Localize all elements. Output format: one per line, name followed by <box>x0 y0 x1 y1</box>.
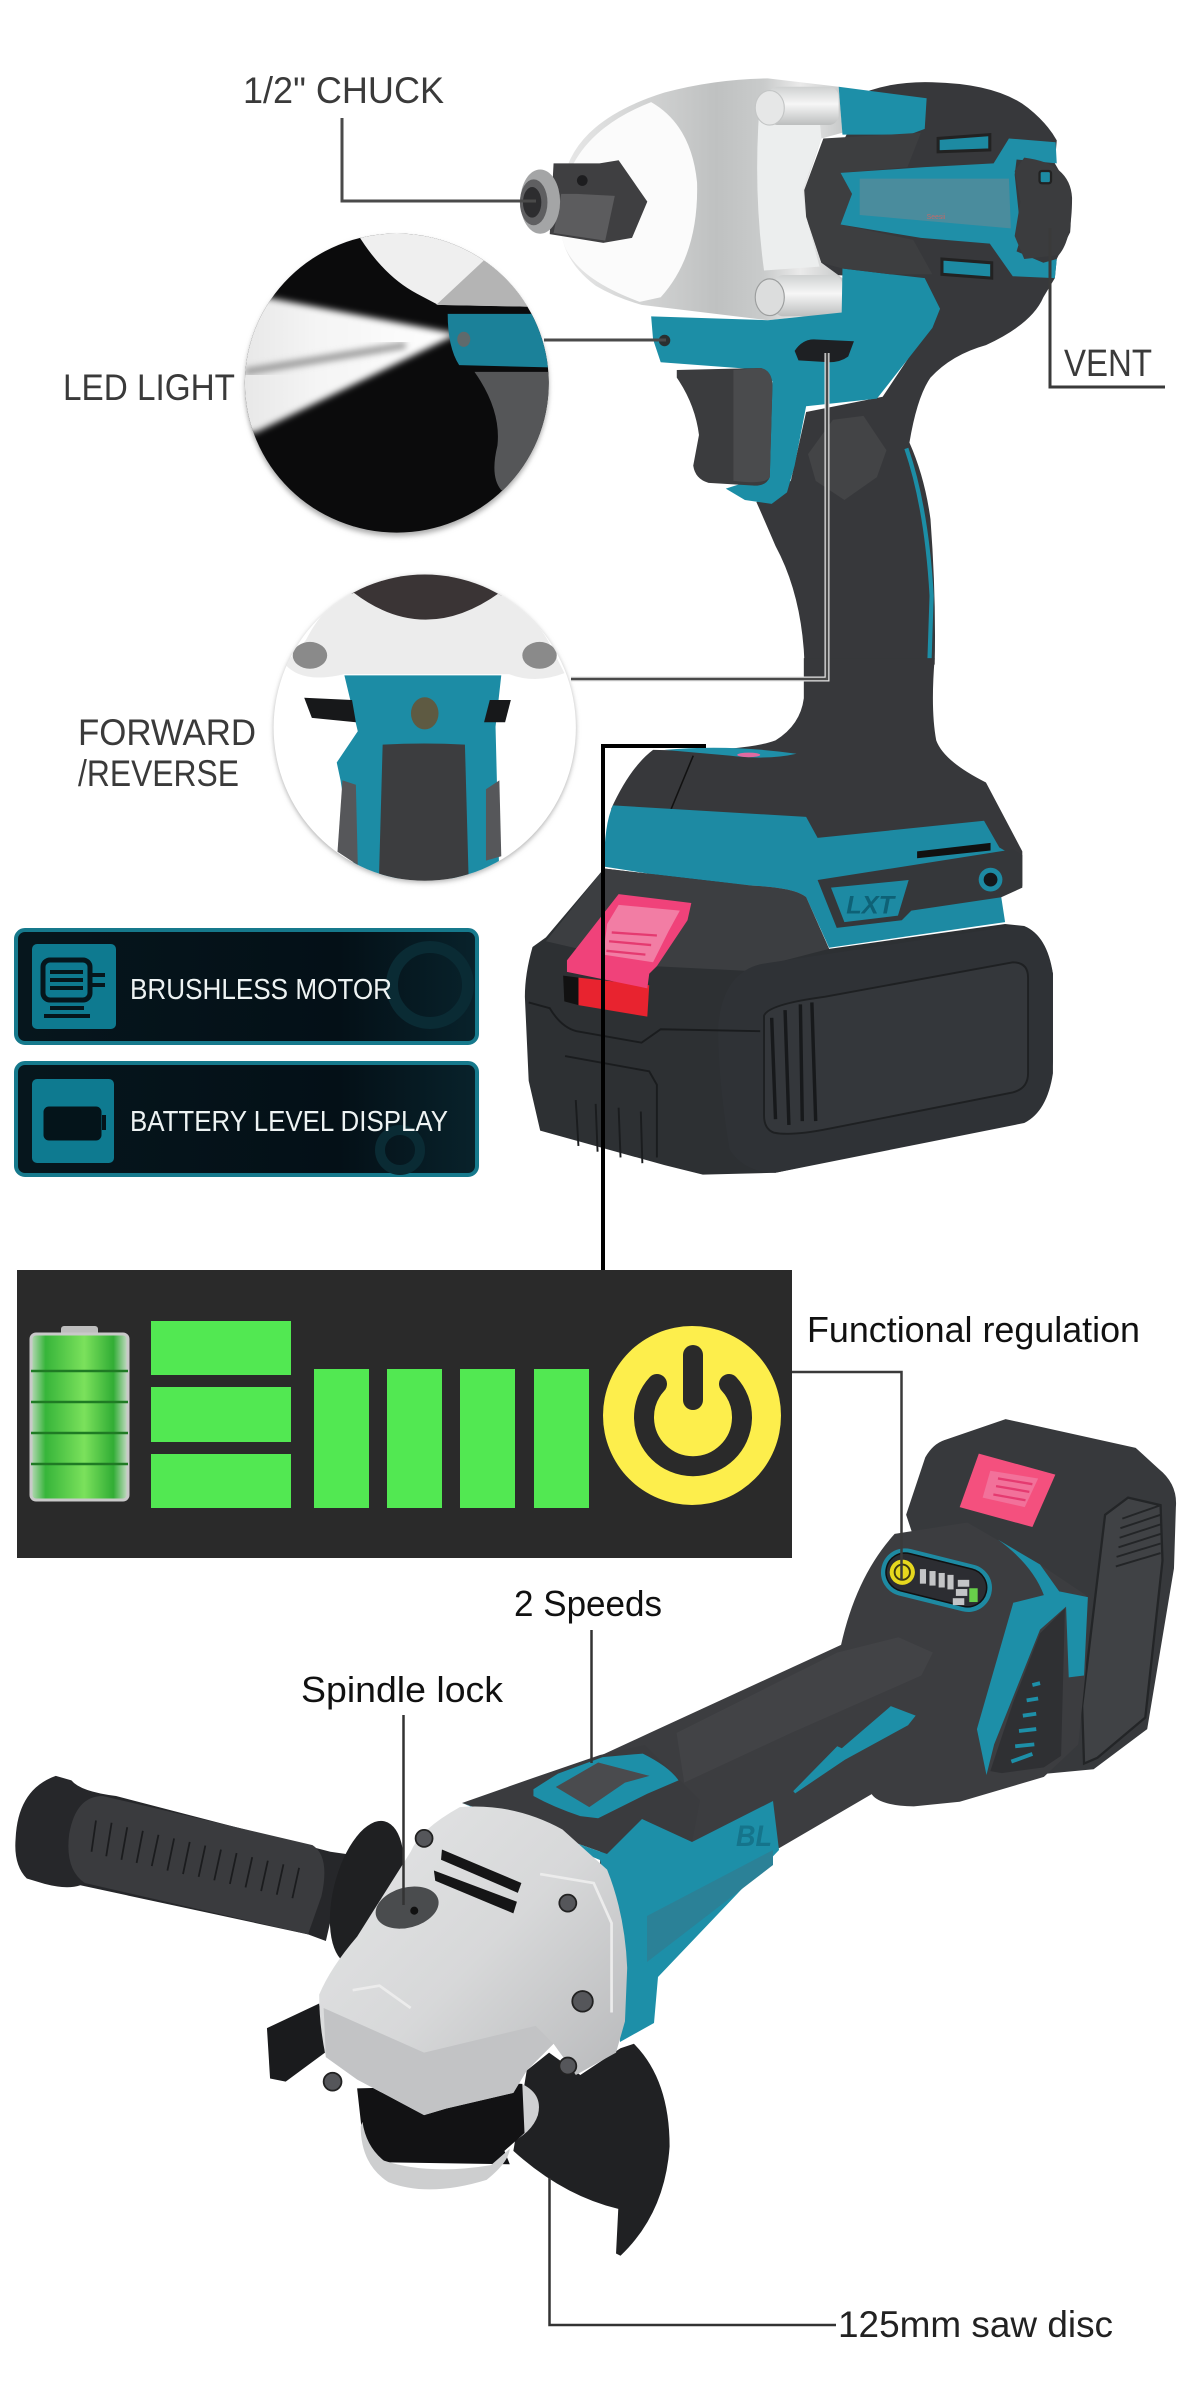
guard rear bracket <box>267 2004 325 2082</box>
callout: chuck line <box>342 118 536 201</box>
battery and tool base: LXT <box>846 891 897 919</box>
flange disc <box>317 1813 417 1972</box>
callout: vent line <box>1050 228 1165 387</box>
label: two speeds: 2 Speeds <box>514 1583 662 1624</box>
upper vent slot <box>938 135 990 152</box>
side silver ridge <box>353 1874 612 2012</box>
battery and tool base <box>525 658 1053 1175</box>
pink latch <box>960 1454 1055 1527</box>
LED dot <box>659 335 670 346</box>
teal body panel <box>647 1850 773 1962</box>
handle bottom and base <box>611 658 1022 897</box>
pink latch <box>567 894 691 988</box>
small rear vents <box>1040 171 1051 183</box>
dark switch deck <box>462 1745 700 1854</box>
icon: green battery <box>31 1326 128 1500</box>
main teal body <box>651 269 940 504</box>
spindle lock button <box>371 1880 443 1935</box>
battery pack <box>906 1419 1176 1775</box>
model badge: BL <box>736 1820 772 1853</box>
gear case front shading <box>324 2008 554 2115</box>
circle outline shadow <box>274 576 576 883</box>
LXT badge <box>831 880 909 922</box>
label: forward: FORWARD <box>78 712 256 753</box>
dark bracket <box>818 849 1022 928</box>
grip texture patch <box>808 416 886 500</box>
silver gear case <box>319 1806 627 2115</box>
impact wrench tool body: Seesii <box>927 214 946 221</box>
white front ring <box>561 102 697 302</box>
angle grinder body <box>600 1419 1176 1936</box>
bell rib <box>757 98 821 270</box>
badge gears <box>380 1130 420 1170</box>
lower vent slot <box>942 259 992 278</box>
angle grinder side handle <box>15 1776 417 1972</box>
label: reverse: /REVERSE <box>78 753 239 794</box>
battery lower shell <box>525 869 1053 1175</box>
angle grinder head <box>267 1754 679 2256</box>
gearbox spindle collar <box>357 2084 525 2164</box>
callout: functional regulation line <box>792 1372 902 1580</box>
callout: forward reverse line core <box>571 353 827 679</box>
grip and rear housing <box>756 82 1071 665</box>
square drive anvil <box>550 160 647 243</box>
label: BATTERY LEVEL DISPLAY <box>130 1106 448 1138</box>
trigger <box>677 368 772 486</box>
label: chuck: 1/2" CHUCK <box>243 70 444 111</box>
battery side frame <box>718 926 1053 1173</box>
teal side frame <box>841 138 1057 278</box>
handle teal stripe <box>906 448 932 665</box>
rear end cap <box>1015 158 1072 259</box>
label: BRUSHLESS MOTOR <box>130 974 392 1006</box>
transparent bell housing <box>561 78 842 320</box>
battery mount teal band <box>604 805 1013 948</box>
label: saw disc: 125mm saw disc <box>838 2304 1113 2345</box>
red latch base <box>578 978 649 1017</box>
yellow power button <box>890 1560 915 1585</box>
top bolt <box>755 87 839 125</box>
label: LED light: LED LIGHT <box>63 367 235 408</box>
battery side panel <box>764 962 1028 1134</box>
silver spindle flange <box>361 2122 510 2189</box>
label: spindle lock: Spindle lock <box>301 1669 504 1710</box>
battery side vent lines <box>1116 1505 1161 1566</box>
icon: battery <box>32 1079 114 1163</box>
callout: battery indicator line <box>603 746 706 1270</box>
callout: spindle lock line <box>402 1715 405 1905</box>
impact wrench tool body <box>520 78 1072 665</box>
circle content <box>268 571 582 887</box>
callout: LED line <box>544 338 666 342</box>
angle grinder teal front body <box>462 1745 779 2042</box>
vent slots <box>441 1850 521 1893</box>
front dark side panels <box>804 133 932 274</box>
callout: saw disc line <box>550 2178 836 2325</box>
battery upper shell <box>546 869 829 971</box>
chuck collar <box>520 169 560 234</box>
forward reverse zoom circle <box>268 571 582 887</box>
LED light zoom circle <box>242 234 552 540</box>
grip body <box>68 1796 324 1934</box>
teal logo panel <box>860 179 1011 228</box>
guard silver rim <box>491 2079 539 2146</box>
LED display oval <box>876 1543 997 1617</box>
badge gears <box>392 947 468 1023</box>
icon: power button <box>603 1326 781 1505</box>
bottom bolt <box>755 275 842 316</box>
four green level bars <box>314 1369 589 1508</box>
teal body <box>462 1801 779 2042</box>
callout: speeds line <box>590 1630 593 1763</box>
forward reverse switch <box>795 339 854 362</box>
base teal sliver <box>665 748 797 758</box>
three stacked green blocks <box>151 1321 291 1508</box>
teal rear side stripe <box>977 1540 1088 1775</box>
base shadow line <box>670 756 693 811</box>
grip ribs <box>92 1821 299 1898</box>
brushless motor badge <box>16 930 477 1043</box>
teal lightning mark <box>793 1706 916 1793</box>
vent triangle <box>990 1609 1065 1773</box>
display segments <box>920 1569 969 1605</box>
shaft highlight <box>677 1637 933 1783</box>
battery front ribs <box>529 1002 760 1163</box>
screws <box>324 1830 593 2091</box>
battery side ribs <box>772 1002 816 1125</box>
motor rear body <box>600 1522 1086 1936</box>
battery indicator panel <box>17 1270 792 1558</box>
top teal shell <box>839 87 927 135</box>
round port <box>979 868 1002 892</box>
circle content <box>244 234 549 533</box>
battery level display badge <box>16 1063 477 1175</box>
battery side panel <box>1082 1498 1162 1764</box>
battery slot <box>917 843 991 858</box>
wheel guard <box>513 2044 670 2256</box>
label: functional regulation: Functional regulation <box>807 1309 1140 1350</box>
label: vent: VENT <box>1064 343 1152 385</box>
icon: motor <box>32 944 116 1029</box>
circle shadow <box>245 237 549 536</box>
callout: forward reverse line <box>571 353 827 679</box>
speed switch <box>533 1754 679 1818</box>
